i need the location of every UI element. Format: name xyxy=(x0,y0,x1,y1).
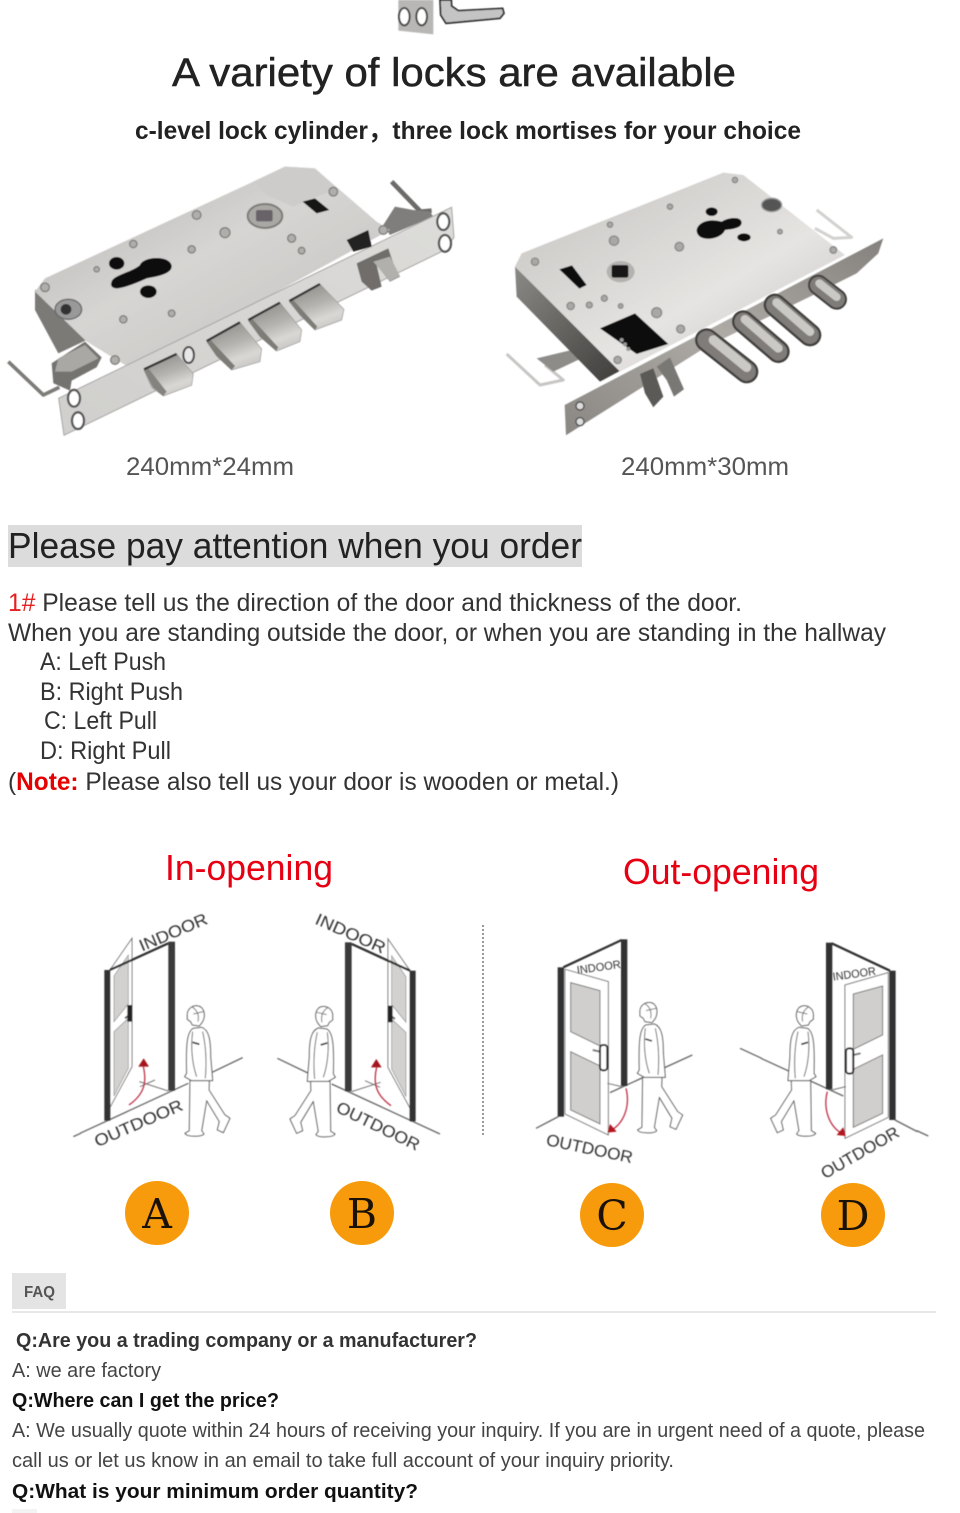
latches xyxy=(640,368,663,407)
instruction line 2: When you are standing outside the door, or when you are standing in the hallway xyxy=(8,619,886,647)
instruction block xyxy=(8,589,886,796)
diagram A: INDOOR xyxy=(136,909,210,955)
slot xyxy=(303,198,329,213)
question 1: Q:Are you a trading company or a manufacturer? xyxy=(16,1330,477,1352)
diagram C xyxy=(536,939,692,1167)
badge C: C xyxy=(596,1192,628,1240)
top right screw xyxy=(762,198,782,212)
face plate xyxy=(565,238,883,435)
FAQ tab xyxy=(12,1273,66,1309)
cylinder 2 xyxy=(743,319,778,352)
bolt 4 xyxy=(289,284,344,330)
rods and rear hardware xyxy=(8,362,59,395)
top plate xyxy=(515,173,845,372)
left rod xyxy=(507,354,563,385)
end block xyxy=(52,342,102,391)
badge C xyxy=(580,1183,644,1247)
diagram D: INDOOR xyxy=(832,966,877,984)
latch slot xyxy=(347,230,372,252)
corner plate shade xyxy=(253,167,337,207)
cylinder keyhole xyxy=(111,258,172,288)
diagram B: OUTDOOR xyxy=(333,1098,423,1155)
small window xyxy=(600,313,668,354)
face plate xyxy=(59,207,454,435)
bolt 3 xyxy=(248,303,302,351)
icon: cropped lock plate and handle at top xyxy=(398,0,504,34)
badge A xyxy=(125,1181,189,1245)
plate holes xyxy=(68,390,80,407)
answer 2 line 1: A: We usually quote within 24 hours of receiving your inquiry. If you are in urgent need of a quote, please xyxy=(12,1420,925,1442)
diagram D: OUTDOOR xyxy=(817,1123,903,1183)
heading text: Please pay attention when you order xyxy=(8,525,582,566)
heading bar xyxy=(8,525,582,567)
lock mortise 24mm photo xyxy=(8,167,454,435)
right rod xyxy=(815,210,852,238)
answer 2 line 2: call us or let us know in an email to take full account of your inquiry priority. xyxy=(12,1450,674,1472)
cropped answer marker xyxy=(12,1509,37,1513)
heading: in-opening: In-opening xyxy=(165,847,333,888)
diagram A: OUTDOOR xyxy=(91,1096,186,1151)
side wall xyxy=(515,267,622,382)
spindle square hole xyxy=(248,204,282,228)
badge A: A xyxy=(141,1190,173,1238)
instruction line 1: 1# Please tell us the direction of the door and thickness of the door. xyxy=(8,589,742,617)
badge D xyxy=(821,1183,885,1247)
size label right: 240mm*30mm xyxy=(621,453,789,481)
diagram C: INDOOR xyxy=(576,959,622,977)
heading: out-opening: Out-opening xyxy=(623,851,819,892)
option D: D: Right Pull xyxy=(40,737,171,765)
option B: B: Right Push xyxy=(40,678,183,706)
option A: A: Left Push xyxy=(40,648,166,676)
spindle xyxy=(607,261,635,282)
note: (Note: Please also tell us your door is wooden or metal.) xyxy=(8,768,619,796)
size label left: 240mm*24mm xyxy=(126,453,294,481)
latch xyxy=(357,248,400,291)
diagram D xyxy=(740,943,928,1183)
cylinder 3 xyxy=(775,303,810,335)
question 3: Q:What is your minimum order quantity? xyxy=(12,1481,418,1503)
bolt 1 xyxy=(144,354,193,396)
plate holes xyxy=(576,402,584,410)
diagram C: OUTDOOR xyxy=(544,1130,635,1167)
FAQ rule xyxy=(12,1311,936,1313)
diagram A xyxy=(73,909,243,1151)
badge B: B xyxy=(347,1190,377,1238)
lock mortise 30mm photo xyxy=(507,173,883,435)
diagram B: INDOOR xyxy=(312,910,389,957)
hex screw xyxy=(55,299,82,319)
body side xyxy=(35,290,87,353)
badge B xyxy=(330,1181,394,1245)
bolt 2 xyxy=(207,322,262,370)
screws xyxy=(41,187,388,364)
keyhole xyxy=(697,218,742,239)
option C: C: Left Pull xyxy=(44,707,157,735)
top plate xyxy=(35,167,390,370)
cylinder 4 xyxy=(818,283,837,299)
FAQ list xyxy=(12,1330,925,1503)
slot xyxy=(559,265,587,289)
subtitle: c-level lock cylinder，three lock mortises for your choice xyxy=(135,117,801,145)
question 2: Q:Where can I get the price? xyxy=(12,1390,279,1412)
answer 1: A: we are factory xyxy=(12,1360,161,1382)
divider dotted xyxy=(482,925,484,1137)
FAQ tab: FAQ xyxy=(24,1284,55,1301)
screws xyxy=(531,177,837,364)
title: A variety of locks are available xyxy=(172,51,736,95)
cylinder 1 xyxy=(707,340,747,372)
badge D: D xyxy=(837,1192,869,1240)
diagram B xyxy=(277,910,440,1155)
